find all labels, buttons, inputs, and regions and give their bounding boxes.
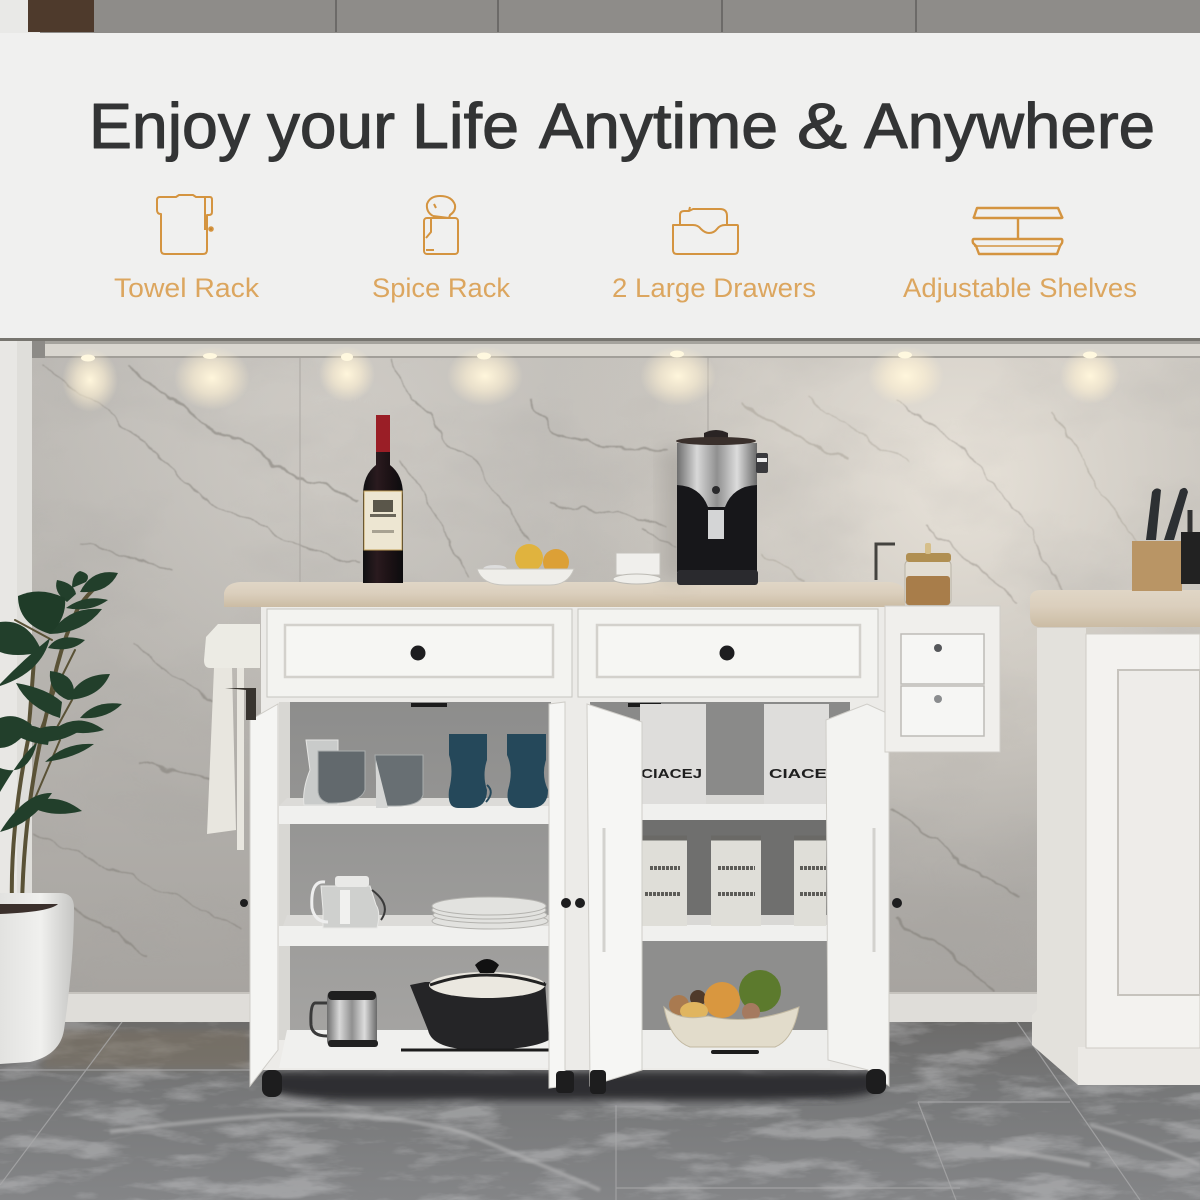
- marble floor: [0, 1022, 1200, 1200]
- label: towel rack: Towel Rack: [114, 273, 260, 303]
- small boxes: [642, 840, 826, 926]
- storage boxes: [640, 704, 829, 804]
- title: Anytime: [539, 90, 778, 162]
- casters: [240, 898, 902, 1097]
- knife block: [1132, 488, 1200, 591]
- bottom shelf: [279, 1030, 549, 1068]
- label: spice rack: Spice Rack: [372, 273, 510, 303]
- fruit plate: [477, 544, 574, 585]
- right base cabinet: [1030, 590, 1200, 1085]
- right drawer: [578, 609, 878, 697]
- left hinged door: [250, 704, 278, 1086]
- kitchen island: [204, 582, 1000, 1097]
- left drawer: [267, 609, 572, 697]
- centre-left door: [549, 702, 565, 1088]
- left white column: [0, 341, 32, 1001]
- title: your: [267, 90, 395, 162]
- steel mug: [311, 991, 378, 1047]
- feature: spice rack: [372, 196, 510, 303]
- bottom shelf: [640, 1030, 830, 1068]
- island body: [261, 606, 889, 1070]
- icon: towel rack: [157, 195, 213, 254]
- title: Life: [412, 90, 519, 162]
- title: Anywhere: [864, 90, 1155, 162]
- planter: [0, 893, 74, 1064]
- upper shelf: [640, 795, 830, 820]
- glasses: [304, 734, 548, 808]
- side spice rack: [885, 606, 1000, 752]
- counter: [1030, 590, 1200, 627]
- middle shelf: [640, 915, 830, 941]
- storage boxes: CIACE: [769, 766, 827, 781]
- upper shelf: [279, 798, 550, 824]
- fruit basket: [664, 970, 799, 1047]
- skirting board: [64, 992, 1200, 1023]
- potted plant: [0, 571, 122, 1064]
- marble wall: [32, 340, 1200, 993]
- title: Enjoy: [89, 90, 250, 162]
- white banner panel: [0, 33, 1200, 338]
- upper wall cabinets strip: [0, 0, 1200, 34]
- wine bottle: [363, 415, 403, 583]
- feature: towel rack: [114, 195, 260, 303]
- cabinet door: [1086, 634, 1200, 1048]
- dutch oven: [410, 959, 549, 1050]
- icon: shelves: [973, 208, 1062, 254]
- small cup and saucer: [613, 553, 661, 584]
- wooden countertop: [224, 582, 905, 607]
- glass teapot: [312, 876, 385, 928]
- right door: [826, 704, 889, 1086]
- icon: spice rack: [424, 196, 458, 254]
- left compartment: [279, 702, 551, 1068]
- feature: drawers: [612, 207, 816, 303]
- plant leaves: [0, 571, 122, 832]
- towel rack: [204, 624, 260, 850]
- cabinet side: [1032, 628, 1086, 1085]
- coffee machine: [662, 430, 768, 585]
- plant stems: [12, 575, 110, 906]
- label: adjustable shelves: Adjustable Shelves: [903, 273, 1137, 303]
- title: &: [797, 90, 847, 162]
- spotlights: [62, 346, 1120, 412]
- storage boxes: CIACEJ: [641, 766, 702, 781]
- middle shelf: [279, 915, 550, 946]
- feature: adjustable shelves: [903, 208, 1137, 303]
- right compartment: [590, 702, 850, 1068]
- centre-right door: [587, 704, 642, 1086]
- ceiling lip: [0, 338, 1200, 358]
- stacked plates: [432, 897, 548, 929]
- title: [89, 90, 1155, 162]
- icon: drawers: [673, 207, 738, 254]
- label: drawers: 2 Large Drawers: [612, 273, 816, 303]
- glass storage jar: [876, 543, 951, 605]
